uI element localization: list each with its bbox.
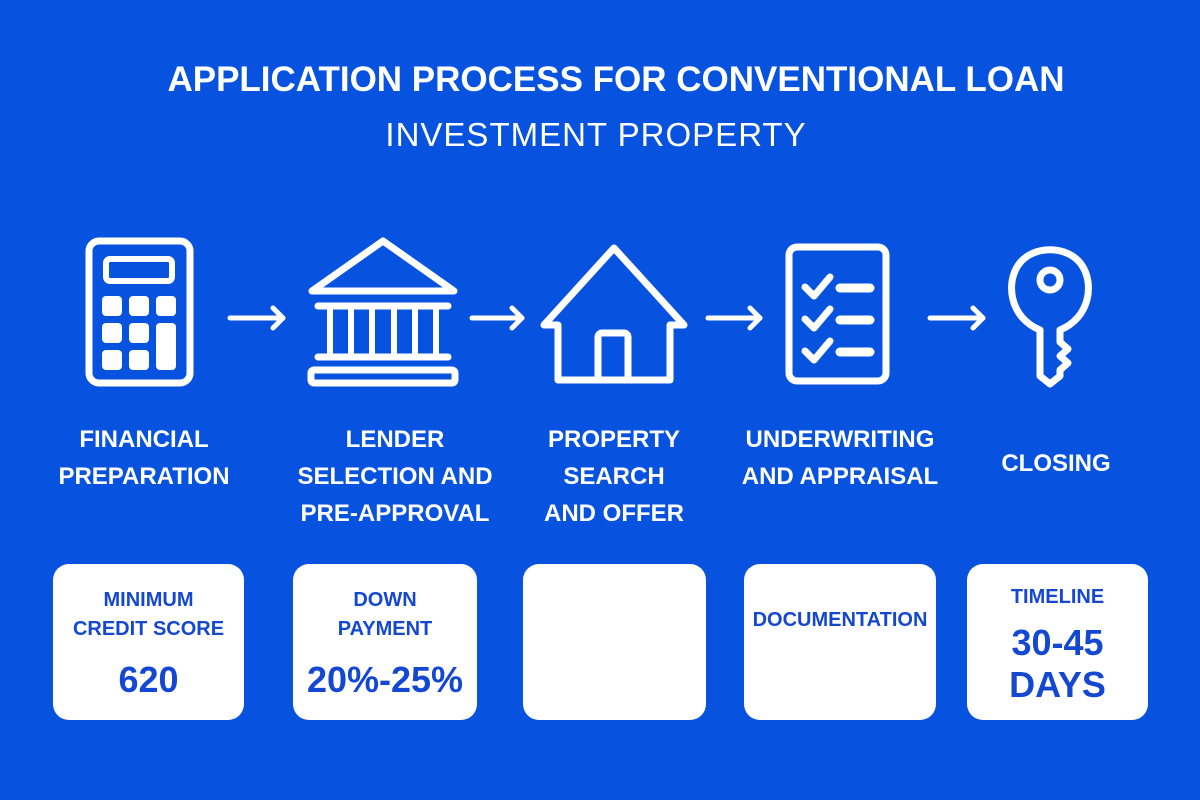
label: property search: AND OFFER [544,500,684,527]
card: documentation: DOCUMENTATION [753,609,927,631]
label: underwriting [742,426,938,490]
label: lender selection: PRE-APPROVAL [301,500,489,527]
icon: house [544,248,684,380]
card: credit score: 620 [118,659,179,700]
arrow 1 [230,308,283,328]
label: underwriting: AND APPRAISAL [742,463,938,490]
label: property search: SEARCH [563,463,665,490]
card: credit score: MINIMUM [104,589,193,611]
icon: calculator [89,241,190,383]
card: credit score [53,564,244,720]
card: down payment: PAYMENT [338,618,432,640]
arrow 3 [708,308,760,328]
label: financial preparation [58,426,230,490]
card: timeline [967,564,1148,720]
label: property search [544,426,684,527]
card: timeline: TIMELINE [1011,586,1104,608]
label: financial preparation: PREPARATION [58,463,230,490]
card: timeline: 30-45 [1011,622,1104,663]
label: lender selection: LENDER [346,426,444,453]
label: lender selection [297,426,493,527]
arrow 4 [930,308,983,328]
title: APPLICATION PROCESS FOR CONVENTIONAL LOAN [167,60,1065,99]
card: timeline: DAYS [1009,664,1106,705]
icon: bank [311,241,455,383]
icon: checklist [789,247,886,381]
card: down payment: DOWN [353,589,417,611]
arrow 2 [472,308,522,328]
label: closing: CLOSING [1001,450,1111,477]
card: down payment [293,564,477,720]
subtitle: INVESTMENT PROPERTY [385,116,807,153]
card: credit score: CREDIT SCORE [73,618,224,640]
icon: key [1012,250,1088,384]
label: lender selection: SELECTION AND [297,463,493,490]
label: underwriting: UNDERWRITING [746,426,934,453]
card: down payment: 20%-25% [307,659,463,700]
card: empty [523,564,706,720]
card: documentation [744,564,936,720]
label: financial preparation: FINANCIAL [79,426,209,453]
label: property search: PROPERTY [548,426,680,453]
